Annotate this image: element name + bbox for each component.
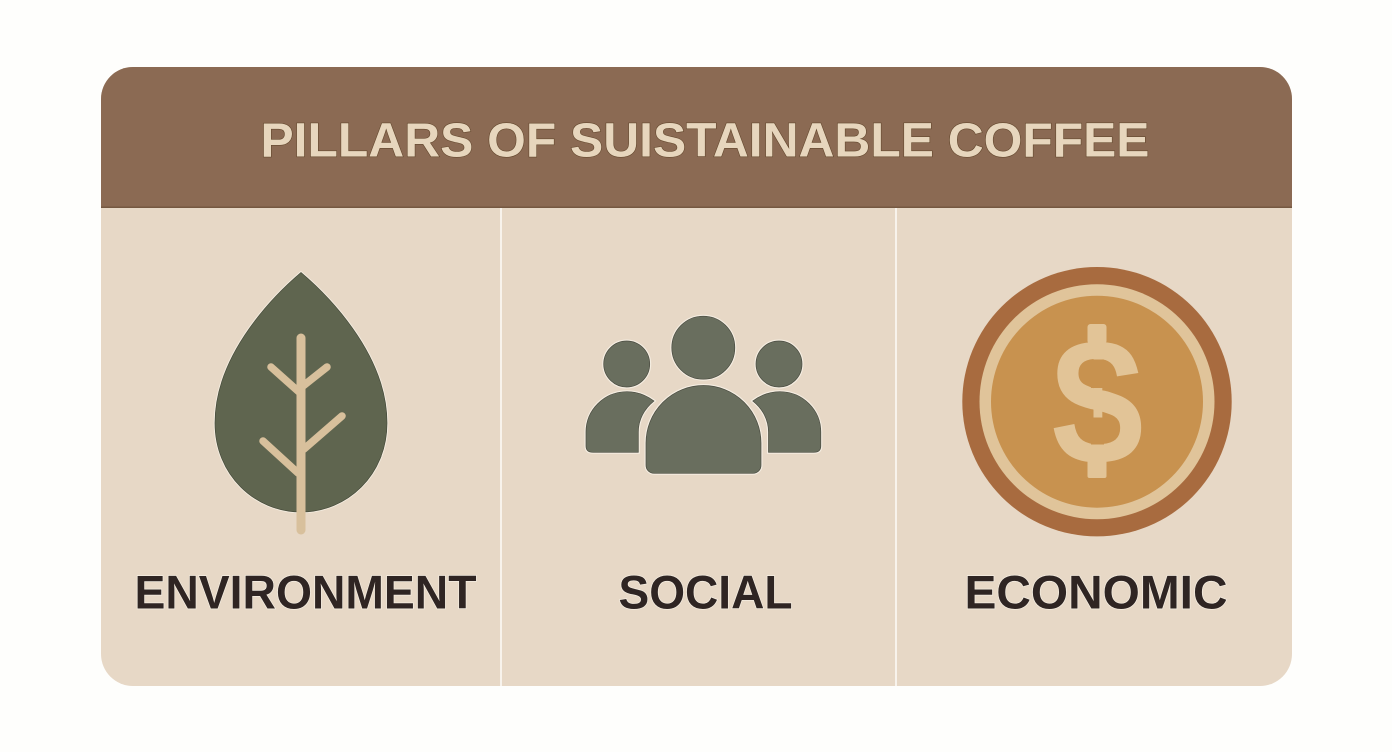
label: social: SOCIAL <box>618 566 792 619</box>
icon: people group <box>586 316 821 473</box>
infographic card <box>101 67 1292 686</box>
title: PILLARS OF SUISTAINABLE COFFEE <box>260 115 1150 168</box>
icon: dollar coin: $ <box>1052 302 1144 503</box>
header band <box>101 67 1292 208</box>
panel: environment <box>134 272 477 619</box>
panel: economic <box>962 267 1232 619</box>
icon: leaf <box>215 272 387 530</box>
icon: dollar coin <box>962 267 1232 536</box>
panel: social <box>586 316 821 619</box>
label: economic: ECONOMIC <box>964 566 1228 619</box>
label: environment: ENVIRONMENT <box>134 566 477 619</box>
